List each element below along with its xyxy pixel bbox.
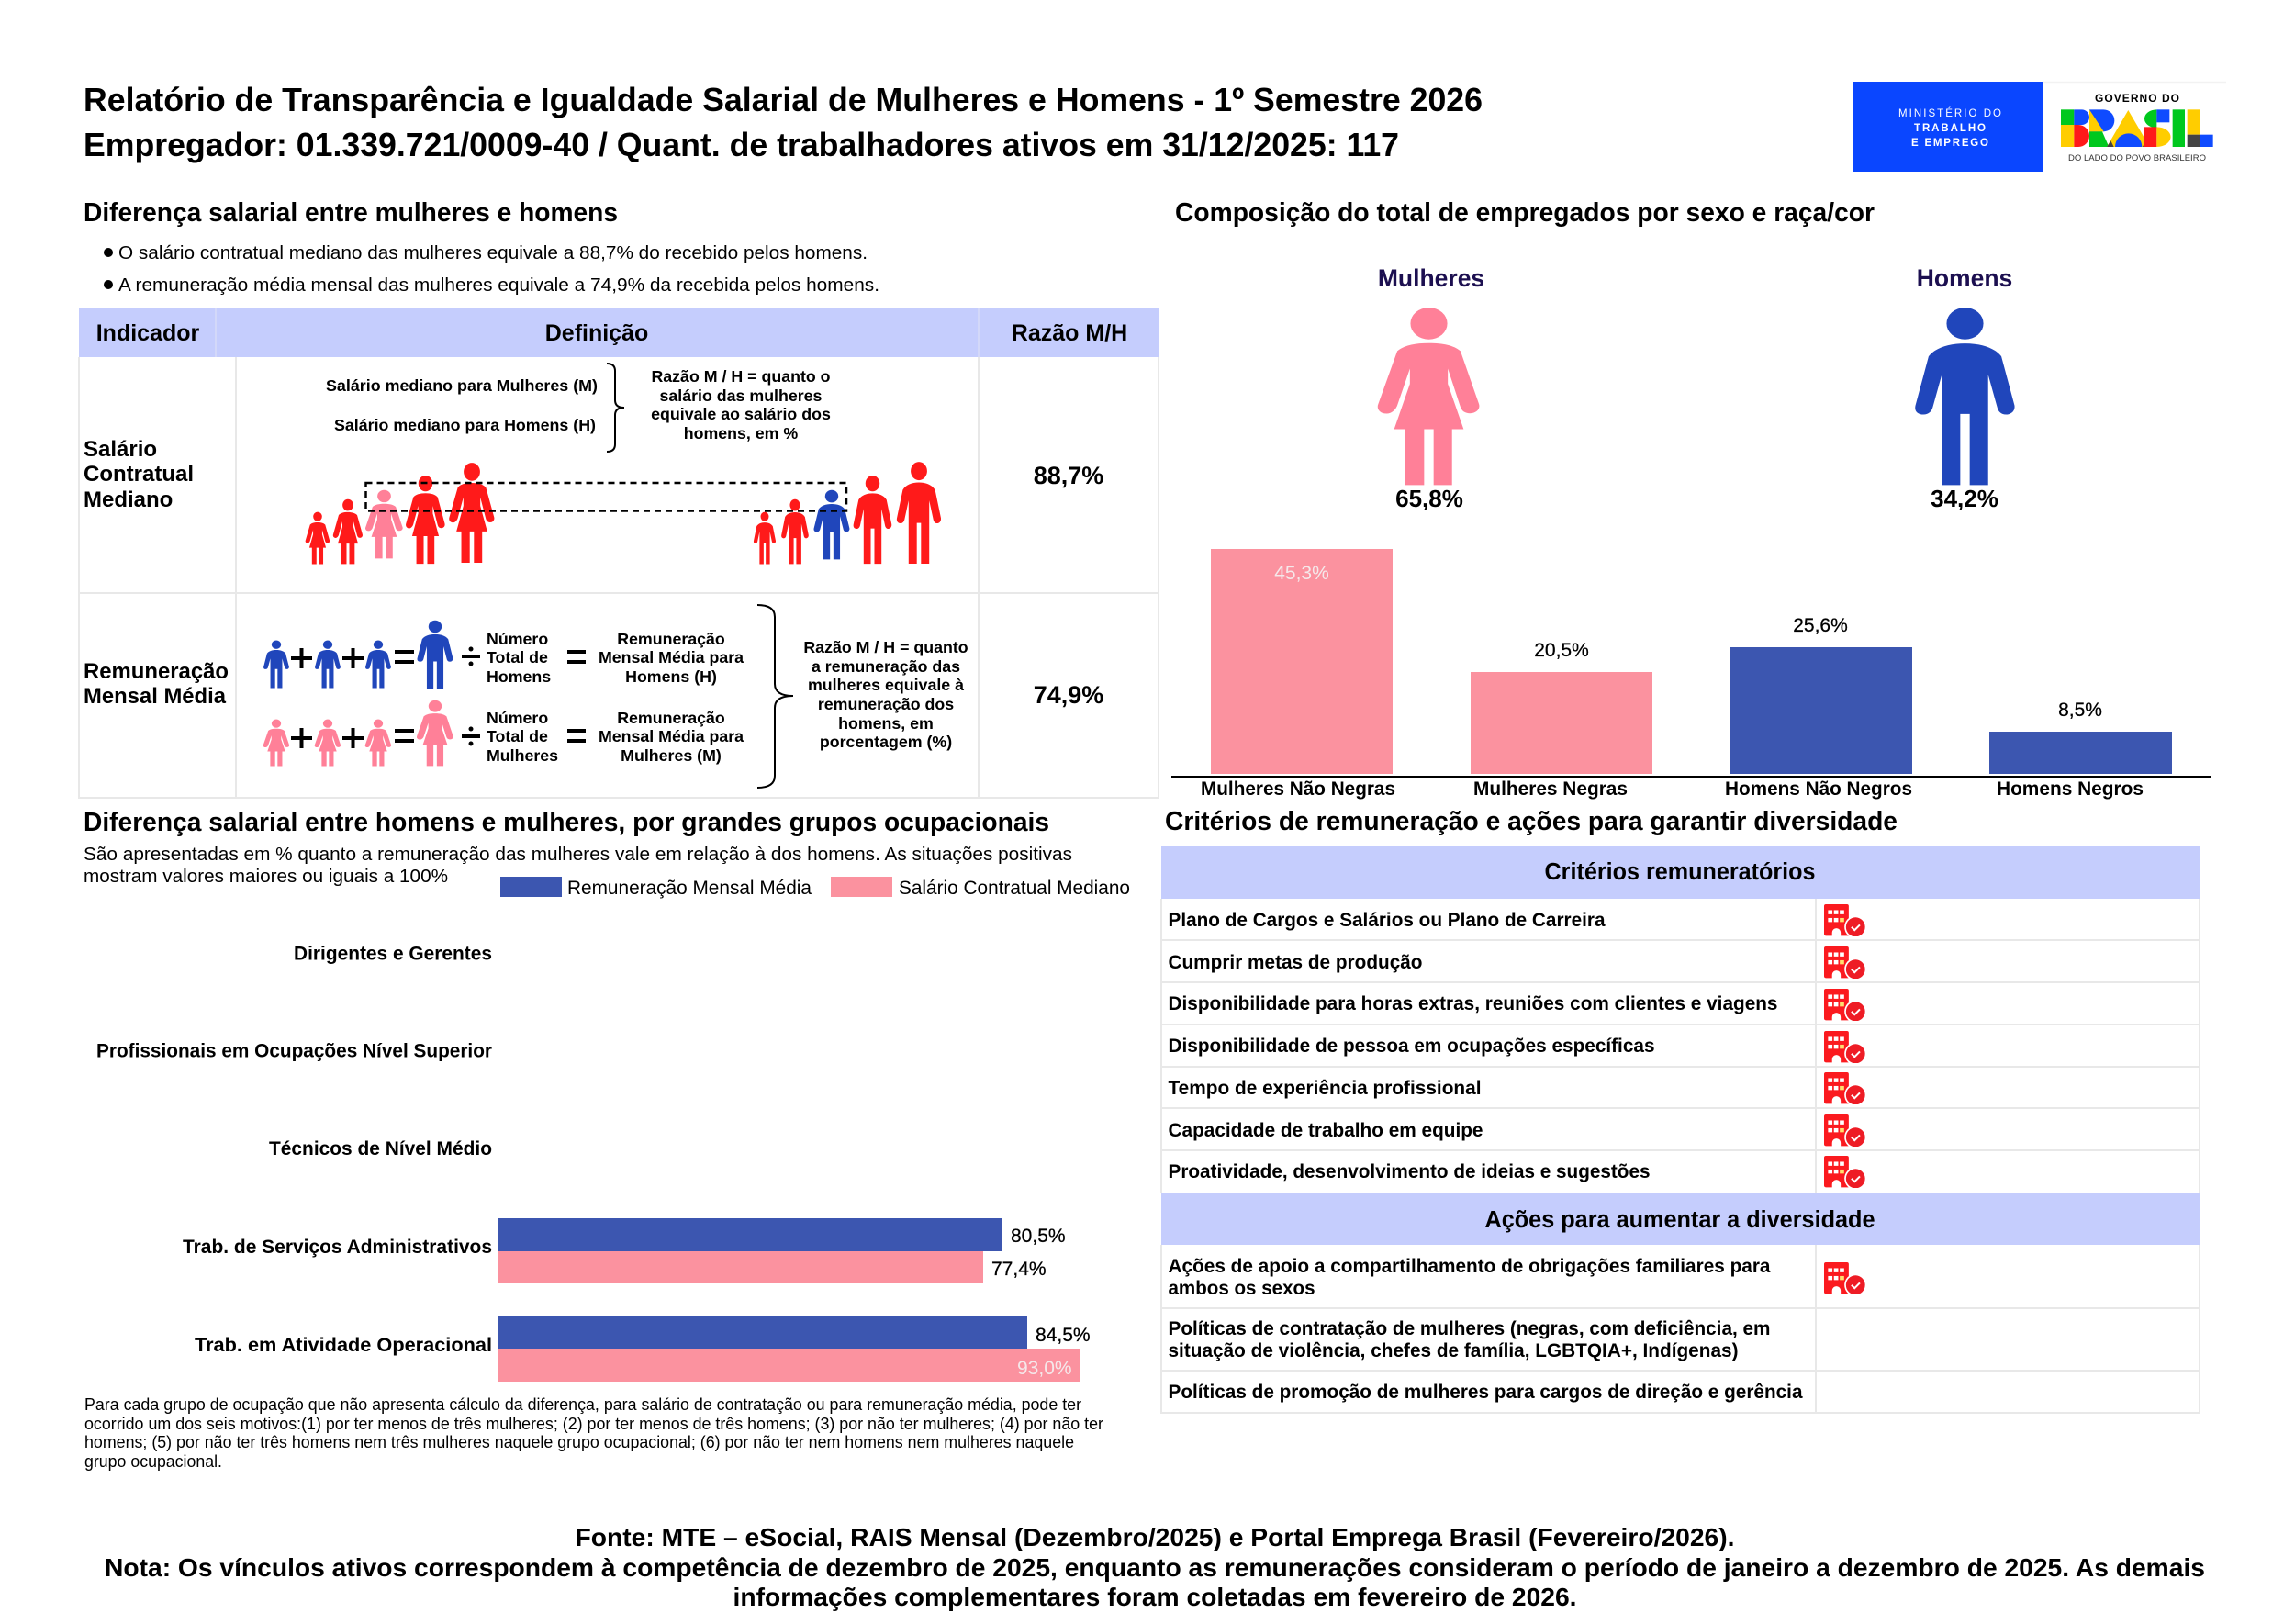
text block: footnote on occupation groups: ocorrido um dos seis motivos:(1) por ter menos de três mulheres; (2) por ter menos de três homens; (3) por não ter mulheres; (4) por não ter: [84, 1415, 1103, 1433]
table header: Razão M/H: [1012, 320, 1127, 346]
heading: critérios: Critérios de remuneração e ações para garantir diversidade: [1165, 807, 1898, 836]
title: Empregador: 01.339.721/0009-40 / Quant. de trabalhadores ativos em 31/12/2025: 117: [84, 126, 1399, 163]
heading: diferença por grupos ocupacionais: Diferença salarial entre homens e mulheres, por grandes grupos ocupacionais: [84, 808, 1049, 837]
table header: [79, 308, 1159, 357]
panel: ações para aumentar a diversidade table: Políticas de promoção de mulheres para cargos de direção e gerência: [1168, 1381, 1804, 1403]
bar chart: grupos ocupacionais: Técnicos de Nível Médio: [269, 1138, 492, 1159]
row: remuneração mensal média: Mulheres: [487, 746, 558, 765]
bar chart: sexo e raça/cor: Mulheres Não Negras: [1201, 778, 1395, 800]
row: remuneração mensal média: Número: [487, 630, 548, 648]
row: salário contratual mediano: salário das mulheres: [660, 386, 823, 405]
panel: indicators table: [79, 308, 1159, 798]
row: remuneração mensal média: Remuneração: [617, 709, 725, 727]
bar chart: grupos ocupacionais: Trab. de Serviços Administrativos: [183, 1237, 492, 1258]
icon: men salaries: [754, 462, 941, 565]
row: remuneração mensal média: Mulheres (M): [621, 746, 722, 765]
panel: men share: Homens: [1917, 264, 2012, 292]
row: remuneração mensal média: 74,9%: [1034, 681, 1103, 709]
text block: footnote on occupation groups: [84, 1395, 1103, 1471]
bar chart: sexo e raça/cor: [1171, 549, 2211, 800]
legend: Remuneração Mensal Média: [567, 878, 812, 899]
row: remuneração mensal média: Mensal Média para: [599, 648, 744, 666]
bar chart: sexo e raça/cor: 20,5%: [1534, 640, 1589, 661]
title: [84, 81, 1483, 163]
logo: Ministério do Trabalho e Emprego / Governo do Brasil: DO LADO DO POVO BRASILEIRO: [2068, 153, 2206, 163]
logo: Ministério do Trabalho e Emprego / Governo do Brasil: MINISTÉRIO DO: [1898, 107, 2001, 119]
bar chart: grupos ocupacionais: Profissionais em Ocupações Nível Superior: [96, 1041, 492, 1061]
row: remuneração mensal média: Remuneração: [84, 659, 229, 684]
panel: critérios remuneratórios table: Critérios remuneratórios: [1544, 859, 1816, 885]
panel: ações para aumentar a diversidade table: situação de violência, chefes de família, LGBTQIA+, Indígenas): [1168, 1339, 1739, 1361]
row: salário contratual mediano: [84, 364, 1103, 565]
bar chart: grupos ocupacionais: Trab. em Atividade Operacional: [195, 1335, 492, 1356]
icons: company checks: [1824, 904, 1866, 1190]
text block: key findings: O salário contratual mediano das mulheres equivale a 88,7% do recebido pelos homens.: [118, 242, 868, 263]
legend: [500, 877, 1130, 899]
row: remuneração mensal média: Remuneração: [617, 630, 725, 648]
row: remuneração mensal média: Homens: [487, 667, 551, 686]
panel: ações para aumentar a diversidade table: [1161, 1193, 2200, 1413]
text block: chart description: mostram valores maiores ou iguais a 100%: [84, 866, 448, 887]
panel: men share: [1915, 264, 2015, 512]
logo: Ministério do Trabalho e Emprego / Governo do Brasil: E EMPREGO: [1911, 138, 1988, 149]
icon: men formula: [263, 621, 586, 689]
row: remuneração mensal média: Total de: [487, 648, 548, 666]
row: remuneração mensal média: [84, 605, 1103, 788]
heading: composição: Composição do total de empregados por sexo e raça/cor: [1175, 198, 1875, 228]
panel: critérios remuneratórios table: Cumprir metas de produção: [1168, 951, 1423, 973]
bar chart: sexo e raça/cor: 25,6%: [1793, 615, 1848, 636]
text block: footnote on occupation groups: Para cada grupo de ocupação que não apresenta cálculo da diferença, para salário de contratação ou para remuneração média, pode ter: [84, 1395, 1081, 1414]
logo: Ministério do Trabalho e Emprego / Governo do Brasil: [1853, 82, 2226, 172]
table header: Definição: [545, 320, 648, 346]
panel: critérios remuneratórios table: Disponibilidade de pessoa em ocupações específicas: [1168, 1035, 1655, 1057]
row: salário contratual mediano: Mediano: [84, 487, 173, 512]
row: salário contratual mediano: homens, em %: [684, 424, 798, 442]
row: remuneração mensal média: Razão M / H = quanto: [803, 638, 968, 656]
bar chart: grupos ocupacionais: Dirigentes e Gerentes: [294, 944, 492, 964]
legend: Salário Contratual Mediano: [899, 878, 1130, 899]
panel: critérios remuneratórios table: Proatividade, desenvolvimento de ideias e sugestões: [1168, 1160, 1651, 1182]
text block: footnote on occupation groups: grupo ocupacional.: [84, 1452, 222, 1471]
icon: women formula: [263, 700, 586, 767]
panel: ações para aumentar a diversidade table: Políticas de contratação de mulheres (negras, com deficiência, em: [1168, 1317, 1770, 1339]
bar chart: grupos ocupacionais: 77,4%: [991, 1259, 1047, 1280]
row: remuneração mensal média: Número: [487, 709, 548, 727]
row: remuneração mensal média: Total de: [487, 727, 548, 745]
text block: footnote on occupation groups: homens; (5) por não ter três homens nem três mulheres naquele grupo ocupacional; (6) por não ter nem homens nem mulheres naquele: [84, 1433, 1074, 1451]
logo: Ministério do Trabalho e Emprego / Governo do Brasil: TRABALHO: [1914, 123, 1986, 134]
row: salário contratual mediano: Salário mediano para Mulheres (M): [326, 376, 598, 395]
bar chart: grupos ocupacionais: [96, 944, 1091, 1382]
row: salário contratual mediano: equivale ao salário dos: [651, 405, 831, 423]
bar chart: grupos ocupacionais: 84,5%: [1036, 1325, 1091, 1346]
text block: source and note: Fonte: MTE – eSocial, RAIS Mensal (Dezembro/2025) e Portal Emprega Brasil (Fevereiro/2026).: [575, 1523, 1735, 1551]
panel: critérios remuneratórios table: Plano de Cargos e Salários ou Plano de Carreira: [1168, 909, 1606, 931]
panel: critérios remuneratórios table: Disponibilidade para horas extras, reuniões com clientes e viagens: [1168, 992, 1778, 1014]
row: salário contratual mediano: Salário: [84, 437, 157, 462]
panel: critérios remuneratórios table: Capacidade de trabalho em equipe: [1168, 1119, 1483, 1141]
text block: source and note: [105, 1523, 2205, 1611]
row: remuneração mensal média: remuneração dos: [818, 695, 954, 713]
row: remuneração mensal média: Mensal Média para: [599, 727, 744, 745]
panel: critérios remuneratórios table: Tempo de experiência profissional: [1168, 1077, 1482, 1099]
text block: chart description: [84, 844, 1072, 887]
text block: key findings: A remuneração média mensal das mulheres equivale a 74,9% da recebida pelos homens.: [118, 274, 879, 296]
text block: source and note: Nota: Os vínculos ativos correspondem à competência de dezembro de 2025, enquanto as remunerações consideram o período de janeiro a dezembro de 2025. As demais: [105, 1553, 2205, 1582]
heading: diferença salarial: Diferença salarial entre mulheres e homens: [84, 198, 618, 228]
row: remuneração mensal média: homens, em: [838, 714, 934, 733]
row: salário contratual mediano: 88,7%: [1034, 462, 1103, 489]
bar chart: grupos ocupacionais: 80,5%: [1011, 1226, 1066, 1247]
row: salário contratual mediano: Razão M / H = quanto o: [651, 367, 831, 386]
icon: women salaries: [306, 463, 494, 565]
row: remuneração mensal média: a remuneração das: [812, 657, 960, 676]
table header: Indicador: [96, 320, 200, 346]
bar chart: sexo e raça/cor: 8,5%: [2058, 700, 2102, 721]
panel: ações para aumentar a diversidade table: Ações de apoio a compartilhamento de obrigações familiares para: [1168, 1255, 1771, 1277]
bar chart: sexo e raça/cor: 45,3%: [1274, 563, 1329, 584]
panel: ações para aumentar a diversidade table: ambos os sexos: [1168, 1277, 1315, 1299]
title: Relatório de Transparência e Igualdade Salarial de Mulheres e Homens - 1º Semestre 2026: [84, 81, 1483, 118]
row: remuneração mensal média: Mensal Média: [84, 684, 227, 709]
panel: women share: [1378, 264, 1484, 512]
text block: chart description: São apresentadas em % quanto a remuneração das mulheres vale em relação à dos homens. As situações positivas: [84, 844, 1072, 865]
row: remuneração mensal média: Homens (H): [625, 667, 717, 686]
bar chart: sexo e raça/cor: Homens Negros: [1997, 778, 2144, 800]
panel: critérios remuneratórios table: [1161, 846, 2200, 1193]
row: remuneração mensal média: porcentagem (%): [820, 733, 952, 751]
panel: men share: 34,2%: [1931, 485, 1998, 512]
text block: source and note: informações complementares foram coletadas em fevereiro de 2026.: [733, 1583, 1577, 1611]
row: salário contratual mediano: Salário mediano para Homens (H): [334, 416, 596, 434]
bar chart: sexo e raça/cor: Homens Não Negros: [1725, 778, 1912, 800]
icon: company check: [1824, 1262, 1866, 1296]
panel: women share: Mulheres: [1378, 264, 1484, 292]
logo: Ministério do Trabalho e Emprego / Governo do Brasil: GOVERNO DO: [2095, 92, 2179, 105]
row: salário contratual mediano: Contratual: [84, 462, 194, 487]
bar chart: grupos ocupacionais: 93,0%: [1017, 1358, 1072, 1379]
panel: ações para aumentar a diversidade table: Ações para aumentar a diversidade: [1485, 1207, 1875, 1233]
panel: women share: 65,8%: [1395, 485, 1463, 512]
bar chart: sexo e raça/cor: Mulheres Negras: [1473, 778, 1628, 800]
text block: key findings: [104, 242, 879, 296]
row: remuneração mensal média: mulheres equivale à: [808, 676, 964, 694]
